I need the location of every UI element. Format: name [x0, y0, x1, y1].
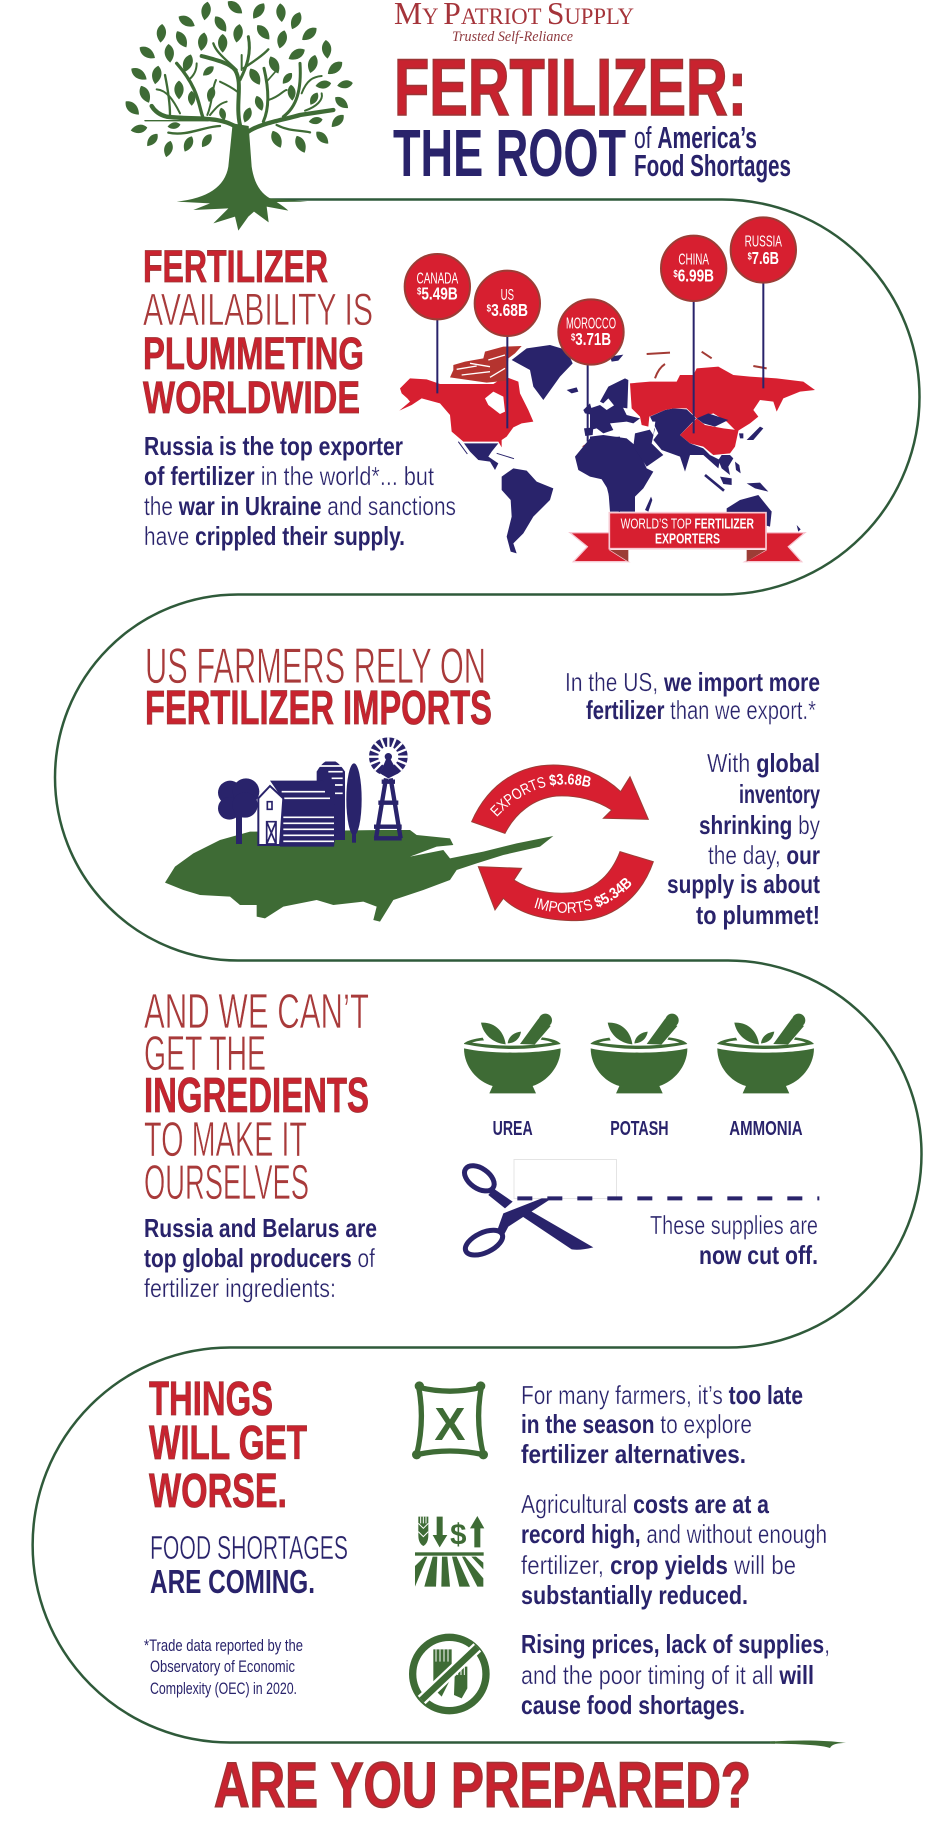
- heading: can't get ingredients: INGREDIENTS: [144, 1069, 369, 1123]
- text: russia and belarus: fertilizer ingredients:: [144, 1273, 336, 1303]
- heading: can't get ingredients: TO MAKE IT: [144, 1113, 307, 1167]
- title: FERTILIZER:: [394, 43, 747, 133]
- icon: fertilizer bag: X: [434, 1398, 466, 1450]
- text: costs record high: [521, 1489, 827, 1610]
- text: global inventory shrinking: supply is about: [667, 869, 820, 899]
- mortar: ammonia: AMMONIA: [729, 1118, 803, 1140]
- heading: can't get ingredients: [144, 985, 369, 1210]
- text: import more than export: In the US, we import more: [565, 667, 820, 697]
- pin: china: $: [673, 269, 678, 280]
- text: global inventory shrinking: to plummet!: [696, 900, 820, 930]
- text: russia supply: the war in Ukraine and sanctions: [144, 491, 456, 521]
- heading: things will get worse: THINGS: [149, 1373, 273, 1426]
- title: of America’s: [634, 120, 757, 155]
- heading: things will get worse: WILL GET: [149, 1417, 307, 1470]
- mortar: urea: [464, 1014, 561, 1140]
- text: food shortages: [150, 1529, 348, 1600]
- panel: availability: [143, 217, 815, 562]
- icon: tree: [122, 0, 353, 231]
- heading: availability plummeting: AVAILABILITY IS: [143, 284, 373, 335]
- text: global inventory shrinking: inventory: [739, 779, 820, 809]
- text: global inventory shrinking: With global: [707, 748, 820, 778]
- banner: top exporters: WORLD’S TOP FERTILIZER: [621, 516, 754, 532]
- heading: can't get ingredients: GET THE: [144, 1027, 266, 1081]
- pin: us: 3.68B: [491, 300, 528, 320]
- banner: top exporters: [570, 513, 805, 562]
- pin: canada: [405, 254, 470, 319]
- text: global inventory shrinking: shrinking by: [699, 810, 820, 840]
- arrow: imports: [478, 851, 654, 922]
- text: too late in season: in the season to explore: [521, 1409, 752, 1439]
- text: costs record high: Agricultural costs are at a: [521, 1489, 769, 1519]
- text: supplies cut off: These supplies are: [650, 1210, 818, 1240]
- heading: farmers rely on imports: FERTILIZER IMPORTS: [145, 682, 492, 735]
- pin: us: $: [487, 303, 491, 314]
- text: too late in season: For many farmers, it’s too late: [521, 1380, 803, 1410]
- flowing green border line: [33, 200, 921, 1742]
- pin: russia: 7.6B: [752, 248, 779, 268]
- text: too late in season: [521, 1380, 803, 1469]
- text: costs record high: record high, and without enough: [521, 1519, 827, 1549]
- pin: morocco: [558, 299, 624, 365]
- heading: availability plummeting: PLUMMETING: [143, 328, 364, 379]
- icon: no wheat: [413, 1637, 486, 1711]
- pin: china: CHINA: [678, 251, 709, 268]
- arrow: imports: IMPORTS $5.34B: [534, 878, 632, 914]
- text: import more than export: [565, 667, 820, 725]
- text: russia and belarus: [144, 1213, 377, 1303]
- text: rising prices: Rising prices, lack of supplies,: [521, 1629, 830, 1659]
- pin: canada: $: [417, 287, 422, 298]
- pin: morocco: 3.71B: [575, 329, 611, 349]
- heading: things will get worse: WORSE.: [149, 1465, 287, 1518]
- text: russia and belarus: top global producers of: [144, 1243, 376, 1273]
- panel: ingredients: [144, 985, 819, 1303]
- text: food shortages: ARE COMING.: [150, 1563, 315, 1600]
- world map: [399, 345, 815, 553]
- text: supplies cut off: [650, 1210, 818, 1270]
- text: import more than export: fertilizer than we export.*: [586, 695, 816, 725]
- heading: availability plummeting: [143, 241, 373, 423]
- panel: things will get worse: [144, 1373, 830, 1720]
- text: russia supply: of fertilizer in the world*... but: [144, 461, 435, 491]
- title: THE ROOT: [393, 116, 626, 191]
- closing headline: ARE YOU PREPARED?: [214, 1749, 751, 1821]
- pin: canada: CANADA: [416, 270, 458, 287]
- text: russia supply: Russia is the top exporter: [144, 431, 403, 461]
- text: rising prices: cause food shortages.: [521, 1690, 745, 1720]
- pin: russia: [731, 217, 796, 283]
- text: rising prices: and the poor timing of it all will: [521, 1660, 814, 1690]
- heading: farmers rely on imports: US FARMERS RELY ON: [145, 638, 486, 694]
- text: costs record high: substantially reduced.: [521, 1580, 748, 1610]
- faint box: [514, 1160, 616, 1198]
- logo: [394, 0, 634, 45]
- pin: us: US: [501, 287, 514, 304]
- pin: canada: 5.49B: [421, 283, 458, 303]
- mortar: potash: [591, 1014, 687, 1140]
- title: Food Shortages: [634, 148, 791, 183]
- map pins and banner: [405, 217, 805, 562]
- mortar: potash: POTASH: [610, 1118, 669, 1140]
- heading: can't get ingredients: OURSELVES: [144, 1156, 309, 1210]
- mortar: urea: UREA: [493, 1118, 533, 1140]
- footnote: *Trade data reported by the: [144, 1636, 303, 1655]
- text: global inventory shrinking: [667, 748, 820, 930]
- text: russia supply: have crippled their supply.: [144, 521, 405, 551]
- arrow: exports: [471, 764, 649, 834]
- banner: top exporters: EXPORTERS: [655, 531, 720, 547]
- heading: things will get worse: [149, 1373, 307, 1518]
- icon: scissors and cut line: [460, 1161, 819, 1260]
- text: global inventory shrinking: the day, our: [708, 840, 820, 870]
- text: costs record high: fertilizer, crop yields will be: [521, 1550, 796, 1580]
- pin: russia: RUSSIA: [745, 234, 782, 251]
- mortar: ammonia: [717, 1014, 814, 1140]
- footnote: Complexity (OEC) in 2020.: [150, 1679, 297, 1698]
- pin: us: [475, 271, 540, 336]
- pin: china: 6.99B: [678, 266, 714, 286]
- heading: farmers rely on imports: [145, 638, 492, 735]
- pin: morocco: MOROCCO: [566, 315, 616, 332]
- text: food shortages: FOOD SHORTAGES: [150, 1529, 348, 1566]
- text: russia supply: [144, 431, 456, 551]
- arrow: exports: EXPORTS $3.68B: [490, 774, 591, 816]
- heading: availability plummeting: WORLDWIDE: [143, 372, 360, 423]
- icon: yield down, cost up: [415, 1516, 484, 1587]
- pin: russia: $: [748, 251, 752, 262]
- text: rising prices: [521, 1629, 830, 1720]
- text: too late in season: fertilizer alternatives.: [521, 1439, 746, 1469]
- icon: fertilizer bag: [412, 1381, 488, 1459]
- heading: availability plummeting: FERTILIZER: [143, 241, 328, 292]
- pin: china: [661, 236, 726, 301]
- text: supplies cut off: now cut off.: [699, 1240, 818, 1270]
- icon: yield down, cost up: $: [450, 1518, 466, 1551]
- footnote: [144, 1636, 303, 1698]
- logo: Trusted Self-Reliance: [452, 29, 573, 45]
- line flourish: [770, 1741, 846, 1748]
- footnote: Observatory of Economic: [150, 1657, 295, 1676]
- title: [393, 43, 791, 191]
- text: russia and belarus: Russia and Belarus are: [144, 1213, 377, 1243]
- heading: can't get ingredients: AND WE CAN’T: [144, 985, 369, 1039]
- illustration: farm on us map: [165, 737, 553, 922]
- panel: imports: [145, 638, 820, 930]
- pin: morocco: $: [571, 332, 576, 343]
